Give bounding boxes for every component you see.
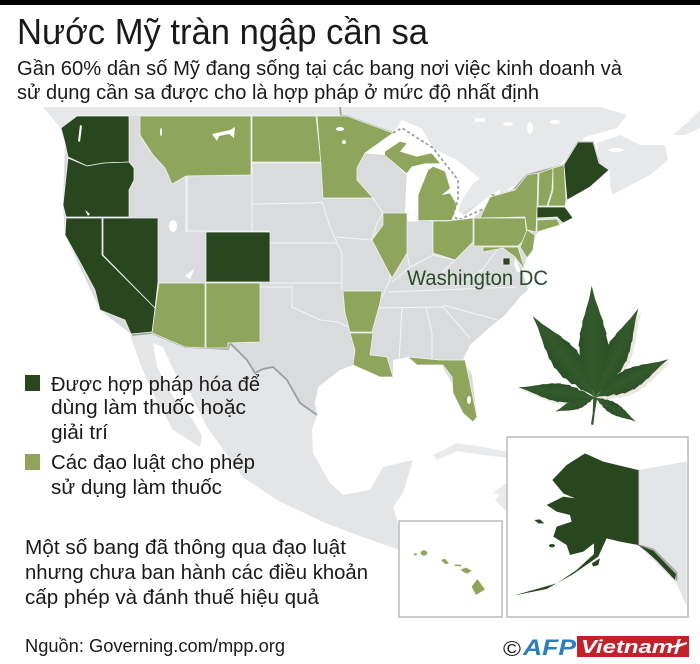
credit: AFP Vietnam+ logo: AFP [522,635,576,660]
US-Canada and US-Mexico borders [132,107,599,415]
note text: cấp phép và đánh thuế hiệu quả [25,587,320,609]
note text: nhưng chưa ban hành các điều khoản [25,562,368,584]
legend: legalised for medical or recreational use: dùng làm thuốc hoặc [51,397,246,419]
top black bar [0,0,700,5]
legend: legalised for medical or recreational use: Được hợp pháp hóa để [51,374,260,396]
land: Mexico and Central America [130,333,413,550]
internal state lines [186,116,517,360]
source: Nguồn: Governing.com/mpp.org [25,636,285,656]
legend: medical use laws: Các đạo luật cho phép [51,452,255,474]
legend: legalised for medical or recreational use: giải trí [51,422,108,444]
legend: legalised for medical or recreational use [25,374,260,444]
inset: Alaska [507,437,688,617]
inland lakes and water specks [78,125,471,404]
credit: AFP Vietnam+ logo: © [503,638,522,661]
land: Caribbean islands [433,443,523,512]
credit: AFP Vietnam+ logo: Vietnam [581,637,673,657]
legend: medical use laws: sử dụng làm thuốc [51,477,222,499]
land: Canada [43,107,700,220]
states: medical use laws (olive green) [140,116,566,422]
states: legal for medical or recreational use (dark green) [61,116,609,334]
map: United States and neighbours [43,107,700,550]
legend: medical use laws [25,452,255,499]
label: Washington DC: Washington DC [407,267,548,290]
note text: Một số bang đã thông qua đạo luật [25,537,346,559]
Great Lakes [365,120,521,272]
icon: cannabis leaf [517,285,676,427]
subtitle [17,58,623,104]
land: mainland US base [61,116,609,422]
inset: Hawaii [399,521,502,617]
note text [25,537,368,609]
subtitle: sử dụng cần sa được cho là hợp pháp ở mức độ nhất định [17,82,539,104]
credit: AFP Vietnam+ logo [503,635,689,661]
subtitle: Gần 60% dân số Mỹ đang sống tại các bang nơi việc kinh doanh và [17,58,623,80]
title: Nước Mỹ tràn ngập cần sa [17,11,429,52]
